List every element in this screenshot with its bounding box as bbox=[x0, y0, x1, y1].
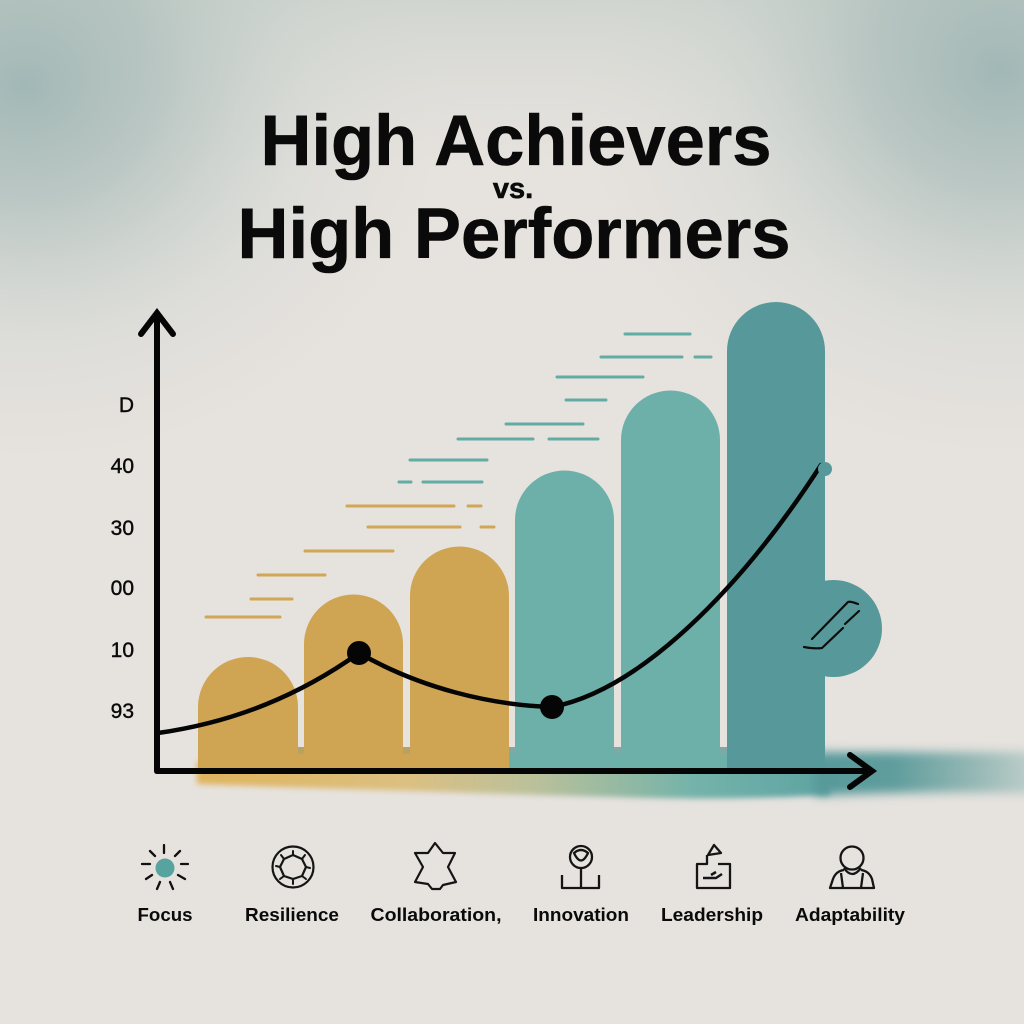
motion dashes: teal bbox=[399, 334, 711, 482]
icon labels: Collaboration, bbox=[370, 904, 502, 925]
y axis labels: 30 bbox=[111, 517, 134, 540]
y axis labels: 40 bbox=[111, 455, 134, 478]
bar chart bbox=[198, 302, 882, 769]
title: vs. bbox=[493, 173, 533, 205]
bar base band bbox=[198, 747, 825, 769]
y axis labels: D bbox=[119, 394, 134, 417]
icon labels: Resilience bbox=[245, 904, 339, 925]
bar 6: dark teal with side badge bbox=[727, 302, 882, 768]
y axis labels: 00 bbox=[111, 577, 134, 600]
icon labels: Innovation bbox=[533, 904, 629, 925]
motion dashes: amber bbox=[206, 506, 494, 617]
icon row bbox=[142, 843, 874, 889]
bar 5: teal bbox=[621, 391, 720, 768]
bar 3: amber bbox=[410, 546, 509, 768]
icon: focus bbox=[142, 845, 188, 889]
icon: collaboration bbox=[415, 843, 456, 889]
icon labels: Adaptability bbox=[795, 904, 906, 925]
title: High Performers bbox=[238, 195, 790, 274]
bar 1: amber bbox=[198, 657, 298, 768]
axes bbox=[141, 313, 872, 787]
y axis labels: 10 bbox=[111, 639, 134, 662]
ground shadow bbox=[197, 752, 1024, 799]
y axis labels bbox=[111, 394, 134, 723]
curve points bbox=[347, 462, 832, 719]
y axis labels: 93 bbox=[111, 700, 134, 723]
icon labels bbox=[138, 904, 906, 925]
icon: resilience bbox=[272, 846, 314, 888]
icon labels: Leadership bbox=[661, 904, 763, 925]
icon: adaptability bbox=[830, 846, 874, 888]
performance curve bbox=[158, 465, 821, 733]
title bbox=[238, 102, 790, 274]
title: High Achievers bbox=[260, 102, 772, 181]
icon: innovation bbox=[562, 846, 599, 888]
icon: leadership bbox=[697, 845, 730, 888]
bar 4: teal bbox=[515, 470, 614, 768]
bar 2: amber bbox=[304, 595, 403, 768]
icon labels: Focus bbox=[138, 904, 192, 925]
icon: pencil on badge bbox=[804, 602, 859, 648]
